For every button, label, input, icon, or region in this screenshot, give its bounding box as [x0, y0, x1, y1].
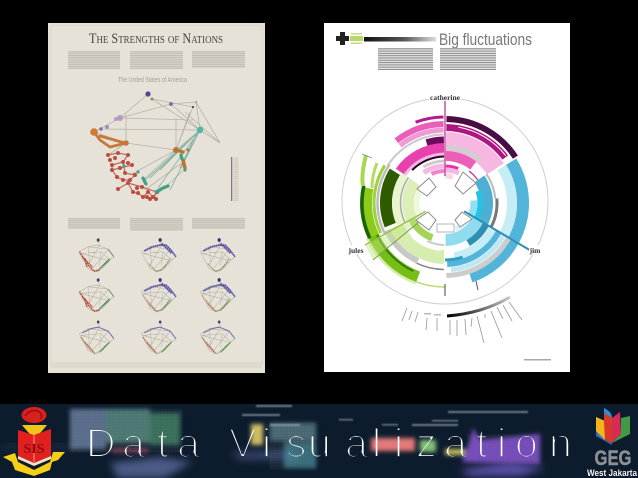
label: jim: jim [529, 246, 541, 255]
inner hub [416, 172, 476, 232]
banner data landscape [0, 405, 545, 478]
lower text columns [68, 218, 245, 231]
banner [0, 404, 638, 478]
panel: The Strengths of Nations poster [48, 23, 265, 373]
map legend [231, 157, 238, 201]
poster title: Big fluctuations [439, 31, 532, 49]
network map: United States [90, 91, 220, 199]
logo: school crest [3, 407, 65, 476]
segment: jules [335, 93, 555, 313]
gradient bar [364, 37, 436, 42]
panel: Big fluctuations poster [324, 23, 570, 372]
text columns [378, 48, 496, 70]
segment: catherine [334, 92, 556, 314]
label: jules: jules [348, 246, 364, 255]
label: catherine: catherine [430, 93, 461, 102]
small multiple network maps [79, 238, 235, 354]
outer green arm [362, 154, 377, 188]
outer ring [342, 98, 548, 304]
map heading: The United States of America [118, 77, 187, 84]
radial dividers [365, 100, 533, 296]
radial chart [334, 92, 556, 314]
header plus icon [336, 32, 349, 45]
banner title: DataVisualization [86, 420, 572, 466]
segment: jim [337, 95, 553, 311]
green wedge [365, 210, 428, 260]
logo: school crest: SIS [23, 442, 45, 457]
poster title: The Strengths of Nations [89, 31, 223, 47]
fan legend [402, 297, 522, 343]
intro text columns [68, 51, 245, 69]
green tag [350, 33, 363, 44]
logo: GEG West Jakarta [587, 408, 638, 478]
credit [524, 359, 551, 360]
